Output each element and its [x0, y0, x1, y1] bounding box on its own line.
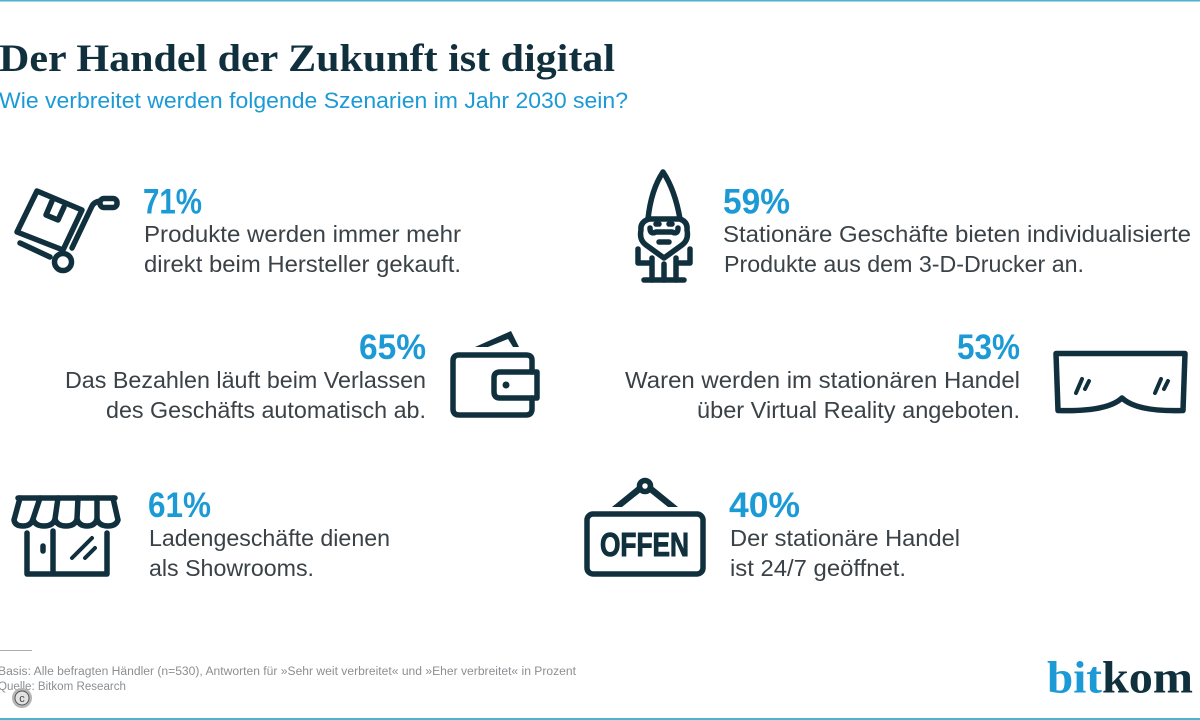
panel: 59% 3D printing	[638, 172, 1191, 280]
icon: VR goggles	[1056, 354, 1185, 411]
icon: open sign: OFFEN	[600, 526, 689, 563]
icon: garden gnome	[638, 172, 690, 280]
text: direct purchase	[144, 221, 461, 277]
percentage: 71%: 71%	[143, 182, 202, 222]
icon: copyright badge	[12, 688, 32, 708]
footnote: basis and source: Quelle: Bitkom Research	[0, 681, 126, 693]
percentage: 53%: 53%	[957, 328, 1020, 367]
text: direct purchase: Produkte werden immer mehr	[144, 221, 461, 247]
text: virtual reality	[625, 367, 1020, 423]
text: open 24/7: ist 24/7 geöffnet.	[730, 555, 906, 581]
text: open 24/7	[730, 525, 960, 581]
icon: wallet	[453, 331, 537, 415]
text: open 24/7: Der stationäre Handel	[730, 525, 960, 551]
percentage: 40%: 40%	[729, 486, 800, 525]
logo: bitkom	[1047, 652, 1193, 702]
panel: 53% virtual reality	[625, 328, 1185, 423]
text: automatic payment: Das Bezahlen läuft beim Verlassen	[65, 367, 426, 393]
text: 3D printing: Stationäre Geschäfte bieten individualisierte	[723, 221, 1191, 247]
panel: 65% automatic payment	[65, 328, 537, 423]
text: direct purchase: direkt beim Hersteller gekauft.	[144, 251, 461, 277]
title: Der Handel der Zukunft ist digital	[0, 37, 615, 80]
panel: 40% open 24/7	[587, 480, 960, 581]
panel: 71% direct purchase	[17, 182, 461, 277]
text: 3D printing: Produkte aus dem 3-D-Drucker an.	[724, 251, 1084, 277]
percentage: 59%: 59%	[723, 182, 790, 222]
text: showrooms	[149, 525, 390, 581]
icon: storefront	[14, 498, 118, 574]
icon: open sign	[587, 480, 703, 574]
text: automatic payment: des Geschäfts automatisch ab.	[106, 397, 426, 423]
text: showrooms: Ladengeschäfte dienen	[149, 525, 390, 551]
icon: hand truck	[17, 191, 117, 270]
text: 3D printing	[723, 221, 1191, 277]
text: virtual reality: über Virtual Reality angeboten.	[697, 397, 1020, 423]
footnote: basis and source: Basis: Alle befragten Händler (n=530), Antworten für »Sehr weit verbreitet« und »Eher verbreitet« in Prozent	[0, 666, 577, 678]
text: showrooms: als Showrooms.	[149, 555, 314, 581]
panel: 61% showrooms	[14, 486, 390, 581]
percentage: 65%: 65%	[359, 328, 426, 367]
icon: copyright badge: c	[19, 693, 25, 705]
subtitle: Wie verbreitet werden folgende Szenarien im Jahr 2030 sein?	[0, 88, 628, 113]
percentage: 61%: 61%	[148, 486, 211, 525]
text: virtual reality: Waren werden im stationären Handel	[625, 367, 1020, 393]
logo: bitkom: bit	[1047, 652, 1103, 702]
footnote: basis and source	[0, 666, 577, 693]
logo: bitkom: kom	[1102, 652, 1193, 702]
text: automatic payment	[65, 367, 426, 423]
